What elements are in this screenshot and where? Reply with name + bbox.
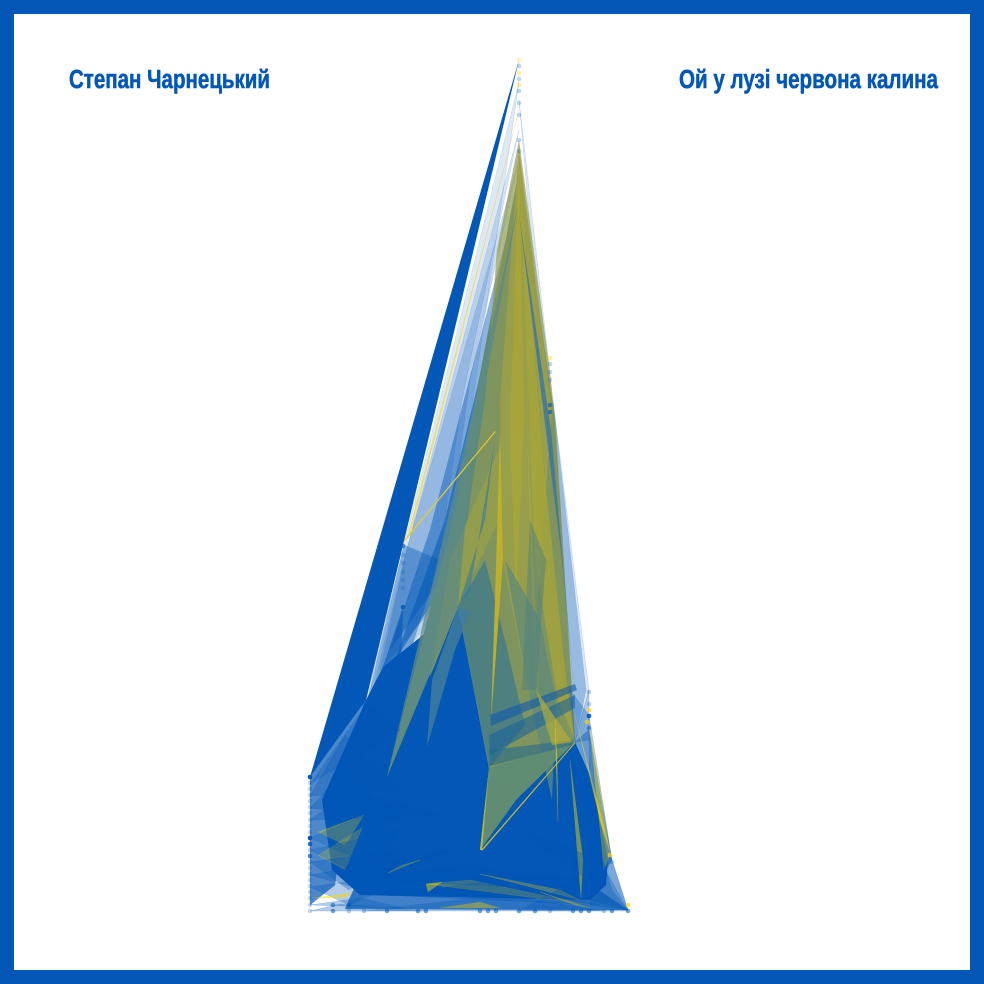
node dots left column xyxy=(308,775,312,913)
node dots upper and right xyxy=(362,64,614,874)
title: author: Степан Чарнецький xyxy=(69,66,270,94)
teal and olive body xyxy=(387,140,577,850)
bottom translucent fan xyxy=(345,860,628,911)
light blue outer fans xyxy=(366,82,589,742)
yellow node dots xyxy=(517,58,630,907)
right translucent fan xyxy=(520,690,628,910)
node dots bottom row xyxy=(331,903,630,913)
chart: song network sail xyxy=(308,58,630,913)
solid blue wedge xyxy=(310,60,519,777)
yellow link line xyxy=(404,431,496,541)
left translucent fan xyxy=(310,700,450,911)
solid blue mass xyxy=(322,607,608,900)
